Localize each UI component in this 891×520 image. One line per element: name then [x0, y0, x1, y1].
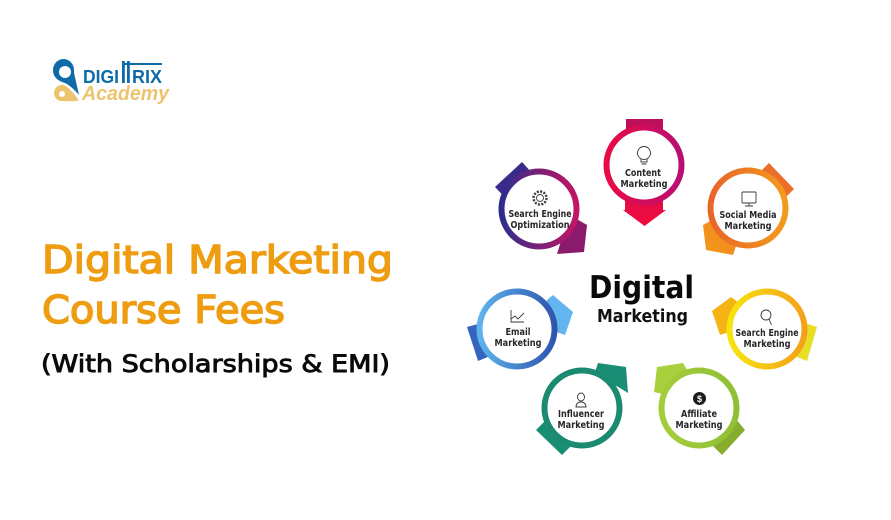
label: Marketing [724, 221, 772, 232]
arrow: email left [467, 322, 495, 361]
node: Social Media Marketing [703, 163, 794, 255]
logo wordmark: Academy: Academy [81, 83, 170, 105]
icon: dollar coin: $ [697, 394, 702, 404]
arrow: email right [545, 295, 573, 335]
icon: light bulb [638, 146, 650, 164]
arrow: SEM right [792, 322, 817, 361]
diagram centre heading: Digital [589, 270, 694, 306]
label [558, 409, 604, 431]
arrow: SEM left [712, 297, 742, 335]
icon: line chart [511, 310, 524, 322]
title: Digital Marketing [42, 238, 393, 282]
logo wordmark: Digitrix: RIX [132, 67, 162, 87]
arrow: social media [703, 163, 794, 255]
arrow: SEO top [495, 162, 542, 208]
node: Content Marketing [606, 119, 682, 226]
arrow: affiliate bottom [712, 418, 745, 455]
diagram centre heading [589, 270, 694, 327]
node: Affiliate Marketing [654, 363, 745, 455]
label: Email [506, 327, 530, 338]
label: Influencer [558, 409, 604, 420]
label [494, 327, 542, 349]
label: Search Engine [736, 328, 798, 339]
arrow: content [623, 119, 666, 226]
diagram centre heading: Marketing [597, 306, 688, 327]
label: Marketing [676, 420, 722, 431]
node: Search Engine Optimization [495, 162, 587, 254]
title: Course Fees [42, 288, 285, 332]
icon: blue location pin [53, 59, 79, 95]
icon: monitor [742, 192, 756, 206]
label [676, 409, 722, 431]
title [42, 238, 393, 332]
label: Marketing [744, 339, 790, 350]
label: Affiliate [681, 409, 717, 420]
label: Content [625, 168, 661, 179]
label: Social Media [720, 210, 776, 221]
label: Optimization [510, 220, 570, 231]
label: Marketing [494, 338, 542, 349]
label: Search Engine [508, 209, 572, 220]
subtitle: (With Scholarships & EMI) [41, 350, 390, 378]
logo wordmark: Digitrix: DIGI [83, 67, 119, 87]
label: Marketing [620, 179, 668, 190]
label [736, 328, 798, 350]
icon: magnifier [761, 310, 772, 325]
logo wordmark: Digitrix [83, 61, 162, 87]
icon: yellow location pin [54, 85, 79, 101]
node: Email Marketing [467, 292, 573, 366]
arrow: affiliate top [654, 363, 690, 395]
label [620, 168, 668, 190]
label: Marketing [558, 420, 604, 431]
node: Influencer Marketing [536, 363, 628, 455]
arrow: influencer [536, 363, 628, 455]
icon: person [576, 393, 586, 407]
label [508, 209, 572, 231]
arrow: SEO bottom [557, 218, 587, 254]
icon: gear [534, 192, 546, 204]
node: Search Engine Marketing [712, 292, 817, 366]
label [720, 210, 776, 232]
logo [53, 59, 170, 105]
